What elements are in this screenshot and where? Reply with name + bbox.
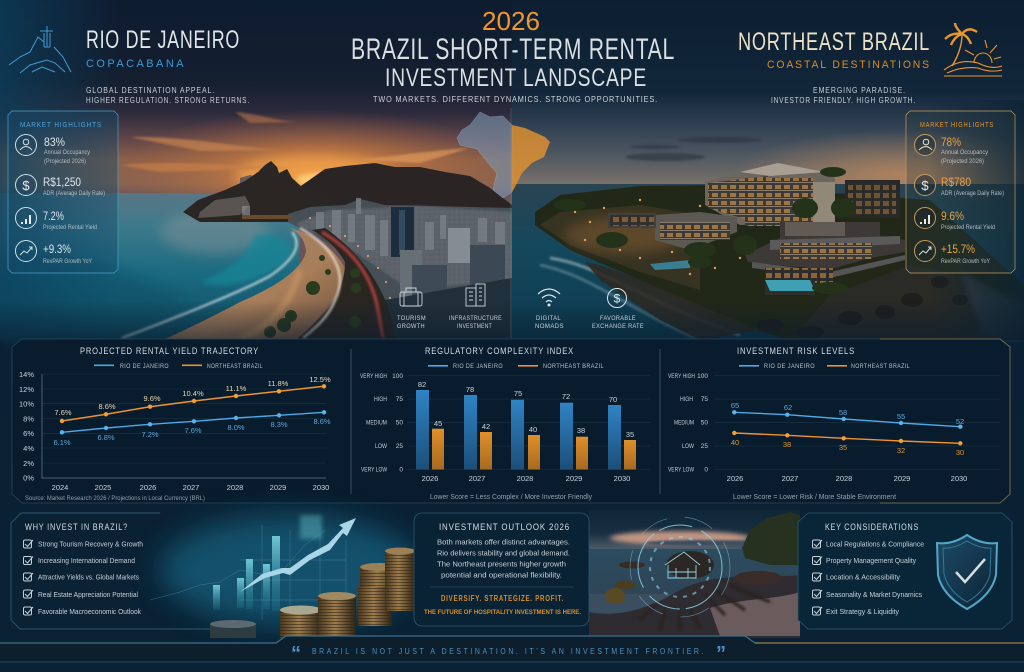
stat: RevPAR growth: +9.3%	[43, 242, 71, 256]
panel heading: MARKET HIGHLIGHTS	[20, 120, 102, 129]
x axis labels: 2027	[469, 474, 485, 483]
chart source note: Source: Market Research 2026 / Projections in Local Currency (BRL)	[25, 496, 205, 502]
chart legend	[428, 363, 604, 370]
photo: rocky beach with hologram	[589, 510, 800, 638]
stat: RevPAR growth	[914, 240, 990, 265]
chart note: Lower Score = Less Complex / More Investor Friendly	[430, 494, 592, 501]
Rio line: 7.6%	[184, 426, 202, 435]
icon: Christ the Redeemer line art	[9, 26, 71, 73]
stat: occupancy: Annual Occupancy	[941, 150, 988, 156]
stat: occupancy: 78%	[941, 135, 961, 149]
bar value labels: 82	[418, 380, 426, 389]
driver: digital nomads: NOMADS	[535, 323, 564, 330]
Northeast line: 11.1%	[226, 384, 247, 393]
stat: RevPAR growth: RevPAR Growth YoY	[43, 259, 92, 265]
checklist	[812, 540, 924, 616]
Rio bars	[416, 390, 621, 470]
Rio tagline: HIGHER REGULATION. STRONG RETURNS.	[86, 96, 250, 105]
x axis labels: 2029	[270, 483, 286, 492]
driver: infrastructure investment: INFRASTRUCTURE	[449, 315, 502, 322]
y axis labels: 75	[396, 396, 403, 403]
villa buildings	[554, 163, 905, 295]
stat: rental yield: 9.6%	[941, 209, 964, 223]
y axis labels: 100	[392, 373, 403, 380]
stat: average daily rate: $	[22, 178, 30, 193]
Rio line: 55	[897, 412, 905, 421]
stat: occupancy: Annual Occupancy	[44, 150, 90, 156]
Northeast line: 30	[956, 448, 964, 457]
y axis labels: 0	[399, 467, 403, 474]
title line one: BRAZIL SHORT-TERM RENTAL	[351, 33, 675, 66]
chart: investment risk levels	[668, 346, 1000, 501]
panel: Rio market highlights	[8, 111, 118, 273]
stat: occupancy: 83%	[44, 135, 65, 149]
y axis labels: MEDIUM	[366, 420, 387, 427]
body text: potential and operational flexibility.	[441, 570, 562, 580]
y axis labels: 100	[697, 373, 708, 380]
bar value labels: 45	[434, 419, 442, 428]
chart legend: RIO DE JANEIRO	[764, 363, 815, 370]
coastal land and rocks	[535, 185, 1024, 340]
Rio line: 8.3%	[270, 420, 288, 429]
Northeast tagline: EMERGING PARADISE.	[813, 86, 906, 95]
Northeast line: 40	[731, 438, 739, 447]
x axis labels	[52, 483, 329, 492]
checklist: Real Estate Appreciation Potential	[38, 590, 138, 599]
x axis labels: 2026	[140, 483, 156, 492]
Northeast line: 35	[839, 443, 847, 452]
heading: INVESTMENT OUTLOOK 2026	[439, 522, 570, 532]
panel: why invest in Brazil	[11, 513, 210, 629]
y axis labels: 10%	[19, 400, 34, 409]
panel: key considerations	[798, 513, 1012, 629]
bar value labels: 35	[626, 430, 634, 439]
Northeast title: NORTHEAST BRAZIL	[738, 28, 930, 56]
body text: Rio delivers stability and global demand.	[437, 548, 570, 558]
stat: rental yield	[914, 208, 995, 231]
checklist: Increasing International Demand	[38, 556, 135, 565]
stat: RevPAR growth	[16, 240, 92, 265]
x axis labels: 2028	[517, 474, 533, 483]
y axis labels: 50	[396, 420, 403, 427]
Rio line: 8.6%	[313, 417, 331, 426]
x axis labels: 2026	[422, 474, 438, 483]
panel: Northeast market highlights	[906, 111, 1015, 273]
Sugarloaf and mountains	[183, 161, 512, 225]
y axis labels: VERY LOW	[668, 467, 695, 474]
Rio heading	[9, 26, 250, 105]
chart title: PROJECTED RENTAL YIELD TRAJECTORY	[80, 346, 259, 356]
stat: average daily rate	[16, 174, 105, 197]
bar value labels: 40	[529, 425, 537, 434]
stat: average daily rate: ADR (Average Daily Rate)	[941, 191, 1004, 197]
bar value labels: 70	[609, 395, 617, 404]
panel: charts strip	[12, 339, 1010, 503]
heading: KEY CONSIDERATIONS	[825, 522, 919, 532]
x axis labels: 2028	[227, 483, 243, 492]
Northeast line: 12.5%	[309, 375, 331, 384]
driver: infrastructure investment: INVESTMENT	[457, 323, 492, 330]
closing line: THE FUTURE OF HOSPITALITY INVESTMENT IS HERE.	[424, 609, 581, 616]
panel heading: MARKET HIGHLIGHTS	[920, 120, 994, 129]
y axis labels: VERY HIGH	[360, 373, 387, 380]
stat: average daily rate: ADR (Average Daily Rate)	[43, 191, 105, 197]
footer banner with quote	[0, 636, 1024, 665]
driver: infrastructure investment	[449, 284, 502, 330]
chart: regulatory complexity index	[360, 346, 650, 501]
Rio line: 65	[731, 401, 739, 410]
driver: digital nomads: DIGITAL	[536, 315, 561, 322]
driver: favorable exchange rate	[592, 288, 644, 330]
stat: occupancy	[16, 134, 90, 165]
stat: average daily rate: R$1,250	[43, 175, 81, 189]
city blocks	[242, 198, 512, 340]
y axis labels	[668, 373, 708, 474]
stat: rental yield: Projected Rental Yield	[43, 225, 97, 231]
chart legend: NORTHEAST BRAZIL	[851, 363, 910, 370]
stat: rental yield	[16, 208, 97, 231]
y axis labels: LOW	[682, 443, 695, 450]
Copacabana subtitle: COPACABANA	[86, 58, 186, 70]
subtitle: TWO MARKETS. DIFFERENT DYNAMICS. STRONG OPPORTUNITIES.	[373, 94, 658, 104]
chart legend: RIO DE JANEIRO	[120, 363, 169, 370]
photo: Northeast Brazil coast	[512, 0, 1024, 340]
y axis labels: MEDIUM	[674, 420, 694, 427]
stat: average daily rate	[914, 174, 1004, 197]
chart legend: RIO DE JANEIRO	[453, 363, 503, 370]
panel: investment outlook	[414, 513, 589, 626]
y axis labels: LOW	[375, 443, 388, 450]
y axis labels: HIGH	[680, 396, 693, 403]
x axis labels: 2030	[951, 474, 967, 483]
bar value labels: 75	[514, 389, 522, 398]
checklist: Property Management Quality	[826, 556, 916, 565]
Rio line	[731, 401, 964, 429]
driver: digital nomads	[535, 289, 564, 330]
chart title: INVESTMENT RISK LEVELS	[737, 346, 855, 356]
Rio line: 7.2%	[141, 430, 159, 439]
stat: average daily rate: R$780	[941, 175, 971, 189]
y axis labels: 6%	[23, 429, 34, 438]
y axis labels	[360, 373, 403, 474]
y axis labels: 0%	[23, 474, 34, 483]
Northeast bars	[432, 429, 636, 470]
stat: occupancy: (Projected 2026)	[941, 159, 984, 165]
y axis labels: 12%	[19, 385, 34, 394]
checklist: Local Regulations & Compliance	[826, 540, 924, 548]
y axis labels: 25	[701, 443, 708, 450]
body text	[437, 538, 570, 580]
Coastal subtitle: COASTAL DESTINATIONS	[767, 59, 931, 71]
x axis labels: 2027	[183, 483, 199, 492]
x axis labels: 2027	[782, 474, 798, 483]
driver: favorable exchange rate: FAVORABLE	[600, 315, 636, 322]
y axis labels: 50	[701, 420, 708, 427]
map of Brazil	[457, 112, 550, 198]
sea	[0, 193, 300, 340]
Rio line: 62	[784, 403, 792, 412]
chart legend	[94, 363, 263, 370]
checklist: Favorable Macroeconomic Outlook	[38, 607, 141, 616]
checklist: Exit Strategy & Liquidity	[826, 607, 899, 616]
driver: tourism growth: GROWTH	[397, 323, 425, 330]
x axis labels: 2028	[836, 474, 852, 483]
call to action: DIVERSIFY. STRATEGIZE. PROFIT.	[441, 594, 564, 603]
Northeast heading	[738, 23, 1002, 105]
driver: favorable exchange rate: EXCHANGE RATE	[592, 323, 644, 330]
heading: WHY INVEST IN BRAZIL?	[25, 522, 128, 532]
y axis labels: VERY HIGH	[668, 373, 695, 380]
icon: palm and sun	[944, 23, 1002, 76]
y axis labels	[19, 370, 34, 483]
footer banner with quote: ”	[716, 643, 726, 665]
driver: tourism growth: TOURISM	[397, 315, 426, 322]
Northeast line: 9.6%	[143, 394, 161, 403]
Rio line	[53, 410, 331, 447]
stat: occupancy	[914, 134, 988, 165]
stat: average daily rate: $	[921, 178, 929, 193]
Rio tagline: GLOBAL DESTINATION APPEAL.	[86, 86, 215, 95]
beach and boulevard	[122, 217, 395, 340]
Northeast line: 8.6%	[98, 402, 116, 411]
x axis labels: 2030	[313, 483, 329, 492]
x axis labels: 2025	[95, 483, 111, 492]
quote text: “	[291, 643, 301, 665]
Rio line: 6.8%	[97, 433, 115, 442]
checklist: Location & Accessibility	[826, 572, 900, 582]
Northeast tagline	[771, 86, 916, 105]
x axis labels: 2026	[727, 474, 743, 483]
body text: Both markets offer distinct advantages.	[437, 538, 570, 546]
chart legend: NORTHEAST BRAZIL	[207, 363, 263, 370]
y axis labels: 8%	[23, 414, 34, 423]
edge shading over photos	[0, 100, 1024, 340]
x axis labels: 2029	[894, 474, 910, 483]
Northeast line	[54, 375, 331, 423]
y axis labels: 14%	[19, 370, 34, 379]
Northeast line: 10.4%	[182, 389, 204, 398]
y axis labels: VERY LOW	[361, 467, 388, 474]
growth drivers row	[397, 284, 644, 330]
stat: RevPAR growth: RevPAR Growth YoY	[941, 259, 990, 265]
stat: rental yield: Projected Rental Yield	[941, 225, 995, 231]
chart title: REGULATORY COMPLEXITY INDEX	[425, 346, 574, 356]
y axis labels: 0	[704, 467, 708, 474]
y axis labels: 2%	[23, 459, 34, 468]
title year: 2026	[482, 6, 540, 36]
x axis labels: 2024	[52, 483, 68, 492]
chart: projected rental yield trajectory	[19, 346, 331, 502]
bar value labels: 78	[466, 385, 474, 394]
Northeast line: 7.6%	[54, 408, 72, 417]
stat: RevPAR growth: +15.7%	[941, 242, 975, 256]
Northeast line: 32	[897, 446, 905, 455]
chart legend	[739, 363, 910, 370]
footer banner with quote: BRAZIL IS NOT JUST A DESTINATION. IT’S AN INVESTMENT FRONTIER.	[312, 647, 706, 656]
chart note: Lower Score = Lower Risk / More Stable Environment	[733, 494, 896, 501]
checklist: Strong Tourism Recovery & Growth	[38, 540, 143, 548]
bar value labels	[418, 380, 634, 439]
checklist: Seasonality & Market Dynamics	[826, 590, 922, 599]
Rio line: 6.1%	[53, 438, 71, 447]
checklist	[24, 540, 143, 616]
Rio line: 52	[956, 417, 964, 426]
y axis labels: 4%	[23, 444, 34, 453]
illustration: rising finance chart with coins	[150, 515, 420, 638]
Northeast tagline: INVESTOR FRIENDLY. HIGH GROWTH.	[771, 96, 916, 105]
checklist: Attractive Yields vs. Global Markets	[38, 572, 139, 582]
Rio tagline	[86, 86, 250, 105]
stat: rental yield: 7.2%	[43, 209, 64, 223]
x axis labels: 2029	[566, 474, 582, 483]
Rio title: RIO DE JANEIRO	[86, 26, 240, 54]
driver: favorable exchange rate: $	[614, 292, 621, 306]
bar value labels: 42	[482, 422, 490, 431]
driver: tourism growth	[397, 288, 426, 330]
title block	[351, 6, 675, 104]
x axis labels	[727, 474, 967, 483]
y axis labels: HIGH	[374, 396, 387, 403]
Northeast line: 38	[783, 440, 791, 449]
bar value labels: 38	[577, 426, 585, 435]
chart legend: NORTHEAST BRAZIL	[543, 363, 604, 370]
photo: Rio de Janeiro Copacabana	[0, 0, 515, 340]
x axis labels: 2030	[614, 474, 630, 483]
Northeast line	[731, 431, 964, 457]
body text: The Northeast presents higher growth	[437, 560, 566, 568]
x axis labels	[422, 474, 630, 483]
bar value labels: 72	[562, 392, 570, 401]
title line two: INVESTMENT LANDSCAPE	[385, 64, 647, 92]
Rio line: 58	[839, 408, 847, 417]
Rio line: 8.0%	[227, 423, 245, 432]
icon: security shield	[937, 535, 997, 609]
y axis labels: 25	[396, 443, 403, 450]
y axis labels: 75	[701, 396, 708, 403]
icon: holographic house circle	[630, 517, 730, 617]
stat: occupancy: (Projected 2026)	[44, 159, 86, 165]
Northeast line: 11.8%	[268, 379, 289, 388]
